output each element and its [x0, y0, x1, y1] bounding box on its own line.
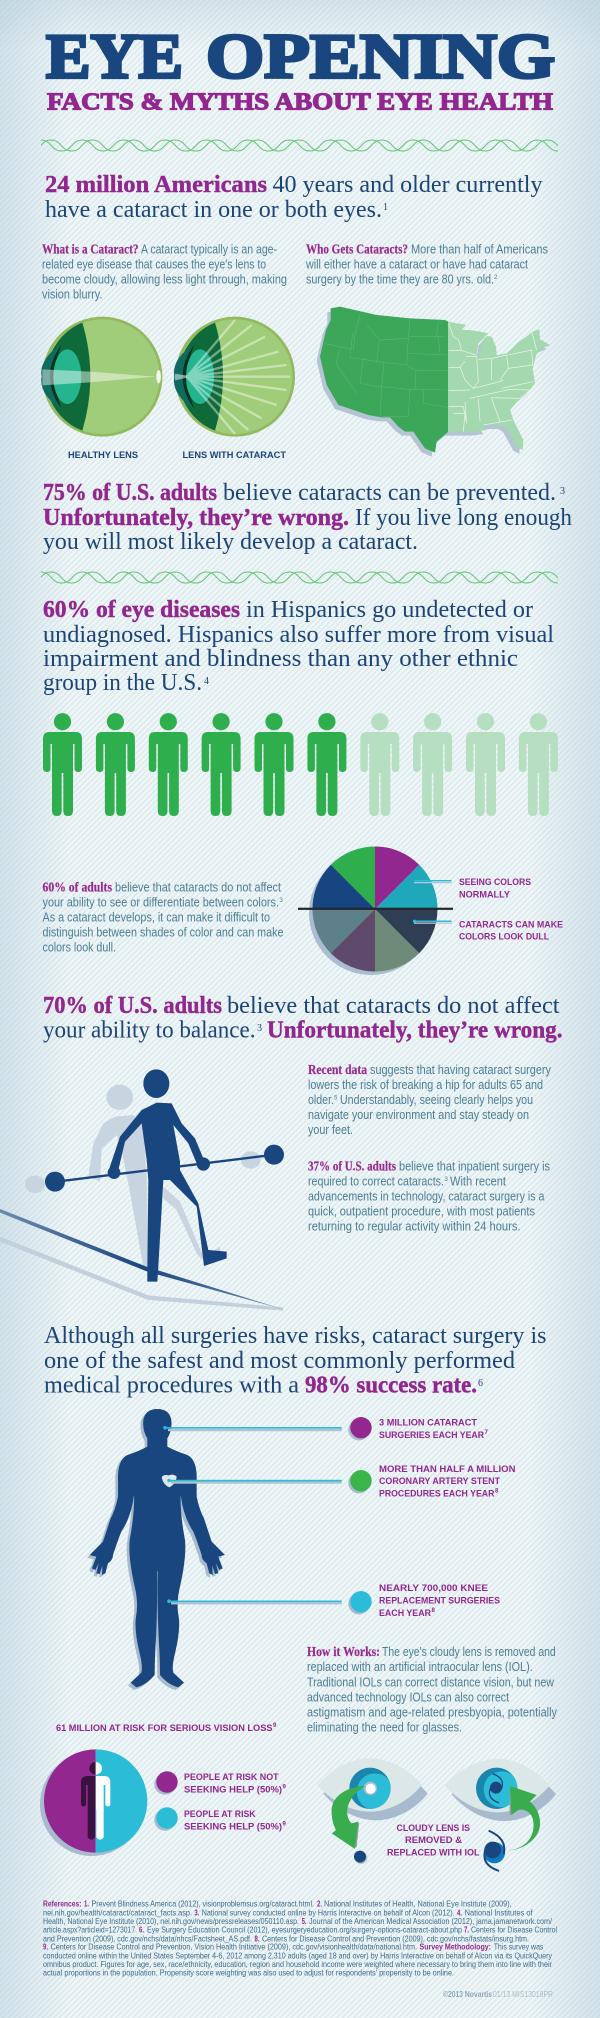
references: 6. [139, 1925, 144, 1935]
text: 37% of U.S. adults [308, 1158, 550, 1233]
headline: 60% of eye diseases: 60% of eye diseases [43, 596, 240, 623]
headline: surgery safety: 98% success rate. [305, 1372, 477, 1399]
figure: human body silhouette [87, 1409, 225, 1690]
label: cataracts can make colors look dull: CATARACTS CAN MAKE [459, 919, 563, 930]
references: 4. [457, 1907, 462, 1917]
text: 60% of adults: distinguish between shades of color and can make [42, 926, 284, 940]
text: 37% of U.S. adults: With recent [450, 1174, 506, 1188]
main figure [108, 1069, 227, 1282]
text: 37% of U.S. adults: returning to regular activity within 24 hours. [308, 1219, 520, 1233]
text: how it works [307, 1644, 558, 1735]
heading: 61 million at risk: 61 MILLION AT RISK FOR SERIOUS VISION LOSS [56, 1723, 272, 1734]
stat: 3 million cataract surgeries [379, 1418, 488, 1441]
figure: person balancing with shadow [0, 1069, 284, 1311]
legend: not seeking help: SEEKING HELP (50%) [184, 1785, 282, 1796]
text: 37% of U.S. adults: advancements in technology, cataract surgery is a [308, 1189, 545, 1203]
references: National Institutes of [465, 1907, 533, 1917]
leader line: knee [167, 1599, 342, 1604]
removal arrow [352, 1823, 359, 1847]
headline: 75% of U.S. adults: believe cataracts can be prevented. [223, 479, 556, 506]
headline: 60% of eye diseases: in Hispanics go undetected or [246, 596, 533, 623]
icon: purple dot [348, 1417, 372, 1440]
text: what is a cataract: What is a Cataract? [42, 242, 138, 256]
title: OPENING [206, 20, 555, 92]
text: how it works: astigmatism and age-related presbyopia, potentially [307, 1706, 558, 1720]
references: nei.nih.gov/health/cataract/cataract_facts.asp. [43, 1907, 192, 1917]
references: Centers for Disease Control [471, 1925, 557, 1935]
headline: 60% of eye diseases [43, 596, 554, 696]
headline: 24 million Americans: 1 [383, 202, 388, 213]
text: what is a cataract: become cloudy, allowing less light through, making [42, 272, 287, 286]
balance pole [45, 1145, 284, 1192]
references: article.aspx?articleid=1273017. [43, 1925, 137, 1935]
references: 1. [84, 1899, 89, 1909]
label: seeing colors normally: SEEING COLORS [459, 877, 531, 888]
text: 37% of U.S. adults: quick, outpatient procedure, with most patients [308, 1204, 535, 1218]
headline: surgery safety [44, 1322, 546, 1399]
text: recent data: navigate your environment and stay steady on [308, 1108, 529, 1122]
labels under eyes [68, 450, 286, 461]
text: recent data: 5 [334, 1096, 338, 1102]
headline: 60% of eye diseases: 4 [204, 676, 209, 687]
body [90, 1409, 225, 1687]
text: who gets cataracts: 2 [494, 275, 498, 281]
title: EYE [46, 20, 183, 92]
stat: knee replacement surgeries: REPLACEMENT SURGERIES [379, 1596, 500, 1607]
text: 60% of adults: your ability to see or differentiate between colors. [42, 896, 279, 910]
text: recent data: lowers the risk of breaking a hip for adults 65 and [308, 1078, 543, 1092]
headline: 24 million Americans [45, 171, 543, 223]
headline: 70% of U.S. adults: 3 [257, 1023, 262, 1034]
person dark half [81, 1762, 96, 1840]
shadow figure [25, 1085, 261, 1267]
stat: 3 million cataract surgeries: 3 MILLION CATARACT [379, 1418, 477, 1429]
stat: coronary stent procedures: MORE THAN HALF A MILLION [379, 1464, 516, 1475]
references: and Prevention (2009), cdc.gov/nchs/data/nhcs/Factsheet_AS.pdf. [43, 1933, 252, 1943]
label: seeing colors normally: NORMALLY [459, 890, 511, 900]
label: cataracts can make colors look dull [459, 919, 563, 943]
cloudy lens dot [355, 1852, 367, 1864]
labels under eyes: LENS WITH CATARACT [182, 450, 286, 461]
references: Centers for Disease Control and Prevention, Vision Health Initiative (2009), cdc.gov/visionhealth/data/national.htm. [50, 1942, 417, 1952]
map: United States half shaded [317, 307, 550, 457]
text: how it works: Traditional IOLs can correct distance vision, but new [307, 1676, 555, 1690]
text: what is a cataract: A cataract typically is an age- [141, 242, 277, 256]
headline: 24 million Americans: 40 years and older currently [272, 171, 543, 198]
icon: cyan dot [348, 1591, 372, 1614]
pictogram: 10 people, 6 highlighted [43, 713, 558, 816]
icon: green dot [348, 1470, 372, 1493]
text: 60% of adults: As a cataract develops, it can make it difficult to [42, 910, 270, 924]
icon: healthy lens eye [41, 317, 162, 437]
headline: 24 million Americans: 24 million Americans [45, 171, 267, 198]
divider wave 1 [20, 140, 568, 151]
leader line: eye [163, 1426, 342, 1431]
insertion arrow [509, 1787, 512, 1815]
people highlighted [43, 713, 346, 816]
text: what is a cataract [42, 242, 287, 302]
text: what is a cataract: vision blurry. [42, 288, 102, 302]
label: cataracts can make colors look dull: COLORS LOOK DULL [459, 932, 549, 943]
copyright [443, 1990, 553, 1999]
legend: not seeking help [154, 1771, 286, 1796]
heart [162, 1475, 177, 1487]
legend: not seeking help: PEOPLE AT RISK NOT [184, 1772, 279, 1783]
headline: 75% of U.S. adults: you will most likely develop a cataract. [43, 528, 418, 555]
references: Journal of the American Medical Association (2012), jama.jamanetwork.com/ [309, 1916, 553, 1926]
chart: 50/50 circle with person [40, 1749, 147, 1856]
stat: coronary stent procedures: 8 [495, 1488, 499, 1494]
IOL lens [484, 1831, 505, 1871]
headline: surgery safety: medical procedures with a [44, 1372, 299, 1399]
text: recent data: your feet. [308, 1123, 353, 1137]
references: actual proportions in the population. Propensity score weighting was also used to adjust for respondents' propensity to be online. [43, 1968, 454, 1978]
heading: 61 million at risk: 9 [273, 1723, 277, 1729]
headline: 70% of U.S. adults [43, 992, 562, 1044]
icon: eye with new IOL [445, 1759, 556, 1871]
references: Survey Methodology: [420, 1942, 491, 1952]
references: 2. [317, 1899, 322, 1909]
ground lines [0, 1209, 283, 1311]
references: 3. [194, 1907, 199, 1917]
headline: 75% of U.S. adults: 75% of U.S. adults [43, 479, 217, 506]
text: who gets cataracts: Who Gets Cataracts? [306, 242, 408, 256]
headline: 70% of U.S. adults: Unfortunately, they’re wrong. [267, 1016, 562, 1044]
subtitle: FACTS & MYTHS ABOUT EYE HEALTH [47, 88, 553, 116]
legend: seeking help: SEEKING HELP (50%) [184, 1822, 282, 1833]
headline: 75% of U.S. adults: If you live long enough [355, 504, 572, 531]
copyright: 01/13 MIS13018PR [493, 1990, 553, 1999]
stat: coronary stent procedures: PROCEDURES EACH YEAR [379, 1488, 495, 1499]
copyright: ©2013 Novartis [443, 1990, 492, 1999]
text: 37% of U.S. adults: required to correct cataracts. [308, 1174, 444, 1188]
leader line: heart [167, 1479, 342, 1484]
stat: knee replacement surgeries: 8 [432, 1608, 436, 1614]
text: 60% of adults: colors look dull. [42, 940, 116, 954]
text: recent data [308, 1062, 552, 1137]
text: recent data: Recent data [308, 1062, 367, 1077]
label: cloudy lens replaced: REMOVED & [405, 1835, 462, 1846]
people faded [360, 713, 558, 816]
headline: 75% of U.S. adults: 3 [560, 486, 565, 497]
text: 60% of adults: 60% of adults [42, 880, 112, 894]
text: who gets cataracts: surgery by the time they are 80 yrs. old. [306, 272, 494, 286]
label: cloudy lens replaced: CLOUDY LENS IS [396, 1823, 470, 1834]
text: recent data: older. [308, 1093, 334, 1107]
headline: 75% of U.S. adults: Unfortunately, they’re wrong. [43, 504, 349, 531]
stat: knee replacement surgeries: NEARLY 700,000 KNEE [379, 1583, 488, 1594]
headline: 60% of eye diseases: undiagnosed. Hispanics also suffer more from visual [43, 621, 554, 648]
references: National survey conducted online by Harris Interactive on behalf of Alcon (2012). [202, 1907, 455, 1917]
text: who gets cataracts [305, 242, 548, 286]
text: how it works: eliminating the need for glasses. [307, 1721, 462, 1735]
text: 37% of U.S. adults: believe that inpatient surgery is [399, 1159, 550, 1173]
headline: 70% of U.S. adults: your ability to balance. [43, 1016, 256, 1044]
headline: 60% of eye diseases: group in the U.S. [43, 669, 202, 696]
text: how it works: replaced with an artificial intraocular lens (IOL). [307, 1660, 533, 1674]
references: Health, National Eye Institute (2010), nei.nih.gov/news/pressreleases/050110.asp. [43, 1916, 299, 1926]
text: 60% of adults [42, 880, 284, 954]
references: This survey was [494, 1942, 543, 1952]
references: 5. [302, 1916, 307, 1926]
legend: seeking help [154, 1807, 286, 1833]
text: how it works: advanced technology IOLs can also correct [307, 1691, 509, 1705]
leader line: seeing colors [414, 880, 452, 883]
references: Centers for Disease Control and Prevention (2009), cdc.gov/nchs/fastats/insurg.htm. [262, 1933, 529, 1943]
headline: 70% of U.S. adults: 70% of U.S. adults [43, 992, 222, 1019]
headline: surgery safety: one of the safest and most commonly performed [44, 1347, 515, 1374]
text: what is a cataract: related eye disease that causes the eye's lens to [42, 258, 266, 272]
headline: 24 million Americans: have a cataract in one or both eyes. [45, 196, 382, 223]
headline: 75% of U.S. adults [43, 479, 572, 555]
legend: not seeking help: 9 [282, 1784, 286, 1790]
headline: surgery safety: 6 [478, 1378, 483, 1389]
text: 60% of adults: believe that cataracts do not affect [115, 880, 281, 894]
references: 7. [464, 1925, 469, 1935]
pie chart: colors normal vs dull [298, 846, 453, 975]
stat: knee replacement surgeries [379, 1583, 500, 1619]
text: 37% of U.S. adults: 3 [444, 1177, 448, 1183]
label: cloudy lens replaced [387, 1823, 480, 1859]
icon: lens with cataract eye [174, 317, 295, 437]
headline: 70% of U.S. adults: believe that cataracts do not affect [227, 992, 560, 1019]
references: National Institutes of Health, National Eye Institute (2009), [324, 1899, 512, 1909]
references [43, 1899, 557, 1978]
text: who gets cataracts: More than half of Americans [411, 242, 548, 256]
stat: coronary stent procedures [379, 1464, 516, 1499]
references: 9. [43, 1942, 48, 1952]
divider wave 2 [20, 572, 568, 583]
text: how it works: The eye's cloudy lens is removed and [382, 1645, 556, 1659]
text: recent data: suggests that having cataract surgery [370, 1063, 552, 1077]
headline: surgery safety: Although all surgeries have risks, cataract surgery is [44, 1322, 546, 1349]
text: recent data: Understandably, seeing clearly helps you [340, 1093, 533, 1107]
icon: eye with cloudy lens removed [317, 1758, 428, 1864]
labels under eyes: HEALTHY LENS [68, 450, 138, 461]
person white half [96, 1762, 110, 1840]
headline: 60% of eye diseases: impairment and blindness than any other ethnic [43, 645, 518, 672]
body shadow [87, 1412, 222, 1690]
stat: knee replacement surgeries: EACH YEAR [379, 1608, 431, 1619]
text: how it works: How it Works: [307, 1644, 380, 1659]
label: cloudy lens replaced: REPLACED WITH IOL [387, 1848, 480, 1859]
label: seeing colors normally [459, 877, 531, 900]
text: 37% of U.S. adults: 37% of U.S. adults [308, 1158, 396, 1173]
stat: coronary stent procedures: CORONARY ARTERY STENT [379, 1476, 500, 1487]
references: 8. [254, 1933, 260, 1943]
references: Eye Surgery Education Council (2012), eyesurgeryeducation.org/surgery-options-cataract-about.php [147, 1925, 462, 1935]
legend: seeking help: 9 [282, 1822, 286, 1828]
text: 60% of adults: 3 [280, 898, 284, 904]
text: who gets cataracts: will either have a cataract or have had cataract [305, 258, 528, 272]
legend: seeking help: PEOPLE AT RISK [184, 1809, 256, 1820]
title [46, 20, 555, 92]
stat: 3 million cataract surgeries: 7 [484, 1430, 488, 1436]
leader line: cataracts [413, 920, 452, 924]
references: References: [43, 1899, 82, 1909]
stat: 3 million cataract surgeries: SURGERIES EACH YEAR [379, 1430, 484, 1441]
references: Prevent Blindness America (2012), visionproblemsus.org/cataract.html. [92, 1899, 314, 1909]
